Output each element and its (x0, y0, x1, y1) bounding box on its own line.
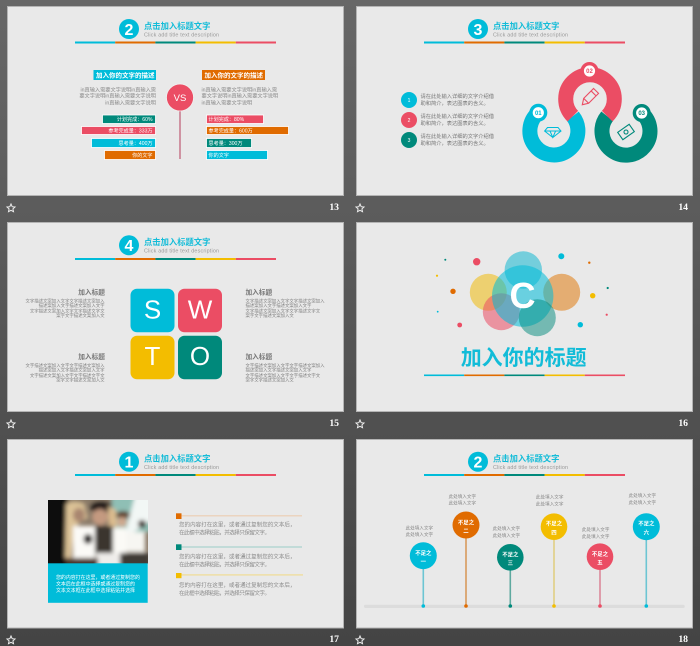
page number 15: 15 (329, 418, 339, 429)
milestone 3: 此处填入文字 (493, 525, 520, 532)
list item 3 (401, 132, 495, 148)
overlapping circles with C: C (510, 275, 536, 316)
blurred team photo (48, 500, 148, 564)
slide 18 heading: 点击加入标题文字 (493, 454, 559, 464)
panel: slide 18 timeline (356, 440, 692, 628)
text block bottom left: 描述案加入文字描述文案加入文字 (39, 367, 105, 374)
list item 1: 助和简介，表达图表的含义。 (420, 99, 489, 107)
note 1: 在此框中选择粘贴，并选择只保留文字。 (179, 529, 270, 537)
scattered dots (436, 253, 609, 327)
list item 2: 助和简介，表达图表的含义。 (420, 119, 489, 127)
panel: slide 13 comparison (8, 6, 344, 196)
note 1: 您的内容打在这里，或者通过复制您的文本后， (179, 521, 295, 529)
node 03: 03 (638, 111, 646, 117)
list item 3: 3 (408, 138, 411, 144)
right bars: 你的文字 (208, 152, 229, 159)
overlapping circles with C (470, 251, 580, 336)
note 2: 您的内容打在这里，或者通过复制您的文本后， (179, 552, 295, 560)
milestone 6: 此处填入文字 (629, 499, 656, 506)
right label (202, 70, 265, 80)
milestone 2: 二 (463, 529, 469, 535)
text block bottom right: 加入标题 (246, 352, 273, 361)
milestone 2: 不足之 (458, 518, 475, 526)
slide 15 title badge (119, 235, 139, 255)
text block bottom right: 文字描述文案加入文字文字描述文字文 (246, 372, 321, 379)
milestone 4: 此处填入文字 (536, 494, 564, 500)
text block top right: 加入标题 (246, 288, 273, 296)
text block bottom left: 加入标题 (78, 352, 105, 361)
milestone 5: 不足之 (592, 550, 609, 558)
icon: banknote (618, 124, 634, 140)
text block bottom right (246, 352, 325, 384)
note 2: 在此框中选择粘贴，并选择只保留文字。 (179, 560, 270, 568)
milestone 1: 一 (421, 560, 427, 566)
milestone 1: 不足之 (415, 549, 432, 557)
slide 14 heading: Click add title text description (493, 32, 568, 38)
right bars (206, 115, 288, 160)
photo caption box (48, 563, 148, 603)
slide 14 title badge: 3 (474, 22, 483, 39)
icon: star 17 (7, 636, 15, 644)
tile W (178, 289, 222, 332)
slide 18 heading: Click add title text description (493, 465, 568, 471)
text block bottom right: 文字描述文案加入文字文字描述文案加入 (246, 362, 325, 369)
icon: diamond (545, 128, 561, 138)
panel: slide 15 SWOT (8, 222, 344, 412)
milestone 1: 此处填入文字 (406, 524, 433, 532)
page number 14: 14 (678, 202, 688, 213)
left paragraph (79, 86, 156, 106)
section title: 加入你的标题 (461, 347, 587, 370)
milestone 2 (449, 493, 480, 608)
text block top right (246, 288, 325, 319)
text block bottom left: 案字文字描述文案加入文 (56, 377, 105, 384)
list item 3: 请在此处输入详细的文字介绍借 (420, 132, 495, 140)
node 02: 02 (586, 69, 593, 75)
right bars: 思考量：300万 (208, 140, 242, 147)
note 1 (176, 513, 302, 537)
text block top right: 描述案加入文字描述文案加入文字 (246, 302, 312, 309)
slide 17 colour rule (75, 474, 276, 476)
text block top right: 文字描述文案加入文字文字描述文字文 (246, 308, 321, 314)
text block bottom right: 案字文字描述文案加入文 (246, 377, 294, 384)
page number 17: 17 (329, 634, 339, 645)
left bars: 参考完成量：333万 (108, 128, 152, 134)
milestone 1 (406, 524, 437, 608)
slide 15 heading: Click add title text description (144, 248, 219, 254)
text block top left: 文字描述文案加入文字文字描述文字文 (30, 308, 105, 314)
slide 14 heading: 点击加入标题文字 (493, 21, 559, 31)
left label (94, 70, 156, 80)
milestone 4 (536, 494, 567, 608)
note 2 (176, 544, 302, 568)
slide 18 heading (493, 454, 568, 471)
list item 3: 助和简介，表达图表的含义。 (420, 139, 489, 147)
slide 13 heading: Click add title text description (144, 32, 219, 38)
milestone 2: 此处填入文字 (449, 493, 476, 500)
left paragraph: in直输入需要文字说明 (105, 98, 156, 106)
slide 17 heading (144, 454, 219, 471)
slide 17 title badge: 1 (125, 454, 134, 472)
slide 16 colour rule (424, 374, 625, 376)
left paragraph: 要文字说明in直输入需要文字说明 (79, 92, 156, 100)
left paragraph: in直输入需要文字说明in直输入需 (80, 86, 156, 94)
milestone 6 (629, 492, 660, 608)
icon: star 18 (356, 636, 364, 644)
slide 14 heading (493, 21, 568, 38)
right bars: 参考完成量：600万 (208, 128, 253, 134)
slide 13 colour rule (75, 42, 276, 44)
slide 15 heading (144, 237, 219, 254)
right paragraph: 要文字说明in直输入需要文字说明 (202, 92, 278, 100)
milestone 3: 不足之 (502, 550, 519, 558)
list item 2 (401, 112, 495, 128)
milestone 4: 不足之 (546, 520, 563, 528)
list item 1: 1 (408, 98, 411, 104)
milestone 3: 三 (508, 560, 514, 567)
tile S: S (144, 294, 161, 324)
text block top left: 描述案加入文字描述文案加入文字 (39, 302, 105, 309)
icon: pencil (580, 88, 599, 107)
photo caption box: 文本文本框在此框中选择粘贴并选择 (56, 587, 135, 594)
slide 14 colour rule (424, 42, 625, 44)
right label: 加入你的文字的描述 (204, 71, 264, 80)
timeline axis (364, 605, 685, 608)
left label: 加入你的文字的描述 (96, 71, 155, 80)
text block bottom left (25, 352, 105, 384)
tile T (130, 336, 174, 379)
milestone 6: 六 (644, 528, 650, 536)
node 01: 01 (535, 111, 542, 117)
slide 15 heading: 点击加入标题文字 (144, 237, 210, 247)
slide 18 title badge (468, 452, 488, 472)
milestone 6: 此处填入文字 (629, 492, 656, 499)
milestone 2: 此处填入文字 (449, 500, 476, 506)
text block top left: 加入标题 (78, 288, 105, 296)
photo caption box: 文本后在此框中选择或通过复制您的 (56, 580, 135, 588)
panel: slide 17 photo and notes (8, 440, 344, 628)
milestone 5: 此处填入文字 (582, 526, 610, 533)
right paragraph: in直输入需要文字说明in直输入需 (202, 86, 277, 94)
slide 15 colour rule (75, 258, 276, 260)
slide 15 title badge: 4 (125, 238, 134, 255)
note 3: 在此框中选择粘贴，并选择只保留文字。 (179, 589, 270, 597)
slide 13 title badge (119, 19, 139, 39)
icon: star 16 (356, 420, 364, 428)
milestone 3 (493, 525, 524, 608)
page number 13: 13 (329, 202, 339, 213)
page number 16: 16 (678, 418, 688, 429)
left bars: 思考量：400万 (119, 140, 152, 147)
left bars: 你的文字 (132, 152, 152, 159)
text block bottom left: 文字描述文案加入文字文字描述文案加入 (25, 362, 105, 369)
milestone 5: 五 (597, 560, 603, 566)
slide 17 title badge (119, 452, 139, 472)
milestone 6: 不足之 (638, 520, 655, 528)
tile O (178, 336, 222, 379)
text block top left: 案字文字描述文案加入文 (56, 312, 105, 319)
milestone 4: 四 (551, 530, 557, 536)
icon: star 14 (356, 204, 364, 212)
right paragraph: in直输入需要文字说明 (202, 98, 252, 106)
right bars: 计划完成：80% (208, 116, 245, 123)
text block top left (25, 288, 105, 319)
slide 13 heading (144, 21, 219, 38)
slide 14 title badge (468, 19, 488, 39)
icon: star 13 (7, 204, 15, 212)
slide 18 title badge: 2 (474, 454, 483, 472)
note 3: 您的内容打在这里，或者通过复制您的文本后， (179, 581, 295, 589)
slide 13 heading: 点击加入标题文字 (144, 21, 210, 31)
panel: slide 14 rings (356, 6, 692, 196)
milestone 5: 此处填入文字 (582, 533, 610, 540)
list item 1 (401, 92, 495, 108)
panel: slide 16 section cover (356, 222, 692, 412)
tile T: T (145, 341, 161, 371)
text block bottom left: 文字描述文案加入文字文字描述文字文 (30, 372, 105, 379)
milestone 5 (582, 526, 613, 608)
slide 17 heading: Click add title text description (144, 465, 219, 471)
VS badge with stem (166, 84, 194, 159)
list item 1: 请在此处输入详细的文字介绍借 (420, 92, 495, 100)
text block top left: 文字描述文案加入文字文字描述文案加入 (25, 298, 105, 304)
ring diagram (529, 62, 651, 155)
text block top right: 案字文字描述文案加入文 (246, 312, 294, 319)
left bars: 计划完成：60% (117, 116, 153, 123)
slide 13 title badge: 2 (125, 22, 134, 39)
tile O: O (190, 341, 210, 371)
list item 2: 2 (408, 118, 411, 124)
milestone 4: 此处填入文字 (536, 500, 564, 508)
milestone 1: 此处填入文字 (406, 531, 433, 538)
tile S (130, 289, 174, 332)
tile W: W (188, 294, 213, 324)
note 3 (176, 573, 303, 597)
list item 2: 请在此处输入详细的文字介绍借 (420, 112, 495, 120)
icon: star 15 (7, 420, 15, 428)
milestone 3: 此处填入文字 (493, 532, 520, 539)
VS badge with stem: VS (174, 93, 186, 104)
slide 18 colour rule (424, 474, 625, 476)
text block bottom right: 描述案加入文字描述文案加入文字 (246, 367, 312, 374)
text block top right: 文字描述文案加入文字文字描述文案加入 (246, 298, 325, 304)
right paragraph (202, 86, 278, 106)
page number 18: 18 (678, 634, 688, 645)
photo caption box: 您的内容打在这里，或者通过复制您的 (56, 574, 140, 581)
slide 17 heading: 点击加入标题文字 (144, 454, 210, 464)
left bars (82, 115, 156, 160)
